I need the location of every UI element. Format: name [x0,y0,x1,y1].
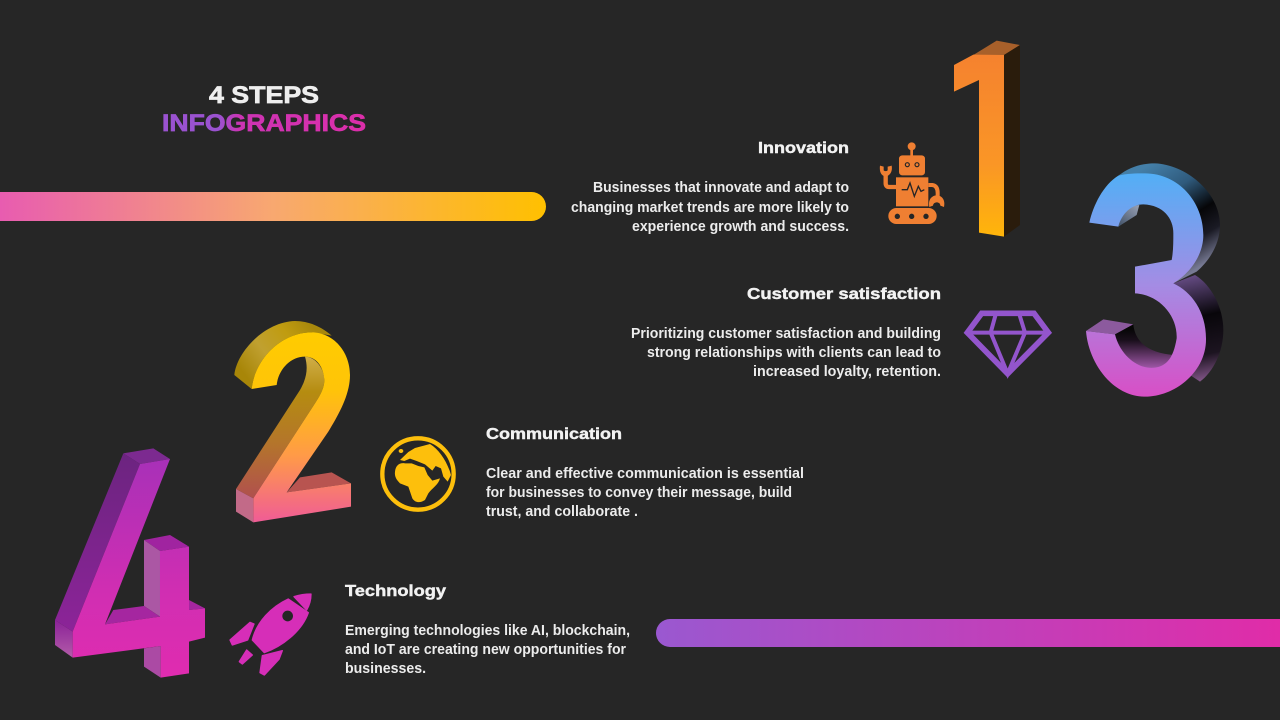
text block: communication: for businesses to convey their message, build [486,485,792,501]
text block: technology: businesses. [345,661,426,677]
title [162,82,366,137]
text block: technology: Emerging technologies like AI, blockchain, [345,623,630,639]
text block: innovation [571,180,849,235]
text block: communication: Clear and effective communication is essential [486,466,804,482]
heading: innovation: Innovation [758,140,849,157]
text block: customer satisfaction: increased loyalty, retention. [753,364,941,380]
panel: communication [382,426,804,520]
text block: customer satisfaction: Prioritizing customer satisfaction and building [631,326,941,342]
panel: customer satisfaction [631,286,1048,380]
heading: technology: Technology [345,583,446,600]
bottom gradient bar [656,619,1280,647]
icon: diamond [967,313,1048,374]
text block: customer satisfaction [631,326,941,380]
numeral 2 [234,321,351,522]
text block: innovation: experience growth and success. [632,219,849,235]
panel: technology [230,583,630,677]
text block: customer satisfaction: strong relationships with clients can lead to [647,345,941,361]
text block: communication [486,466,804,520]
text block: innovation: Businesses that innovate and adapt to [593,180,849,196]
numeral 1 [954,41,1020,237]
icon: rocket [230,594,311,675]
top gradient bar [0,192,546,221]
title: INFOGRAPHICS [162,110,366,137]
text block: innovation: changing market trends are more likely to [571,200,849,216]
numeral 3 [1086,163,1223,397]
icon: globe [382,438,454,510]
panel: innovation [571,140,944,235]
text block: communication: trust, and collaborate . [486,504,638,520]
text block: technology [345,623,630,677]
icon: robot [880,142,944,224]
text block: technology: and IoT are creating new opportunities for [345,642,626,658]
numeral 4 [55,448,205,678]
title: 4 STEPS [209,82,319,109]
heading: customer satisfaction: Customer satisfaction [747,286,941,303]
heading: communication: Communication [486,426,622,443]
